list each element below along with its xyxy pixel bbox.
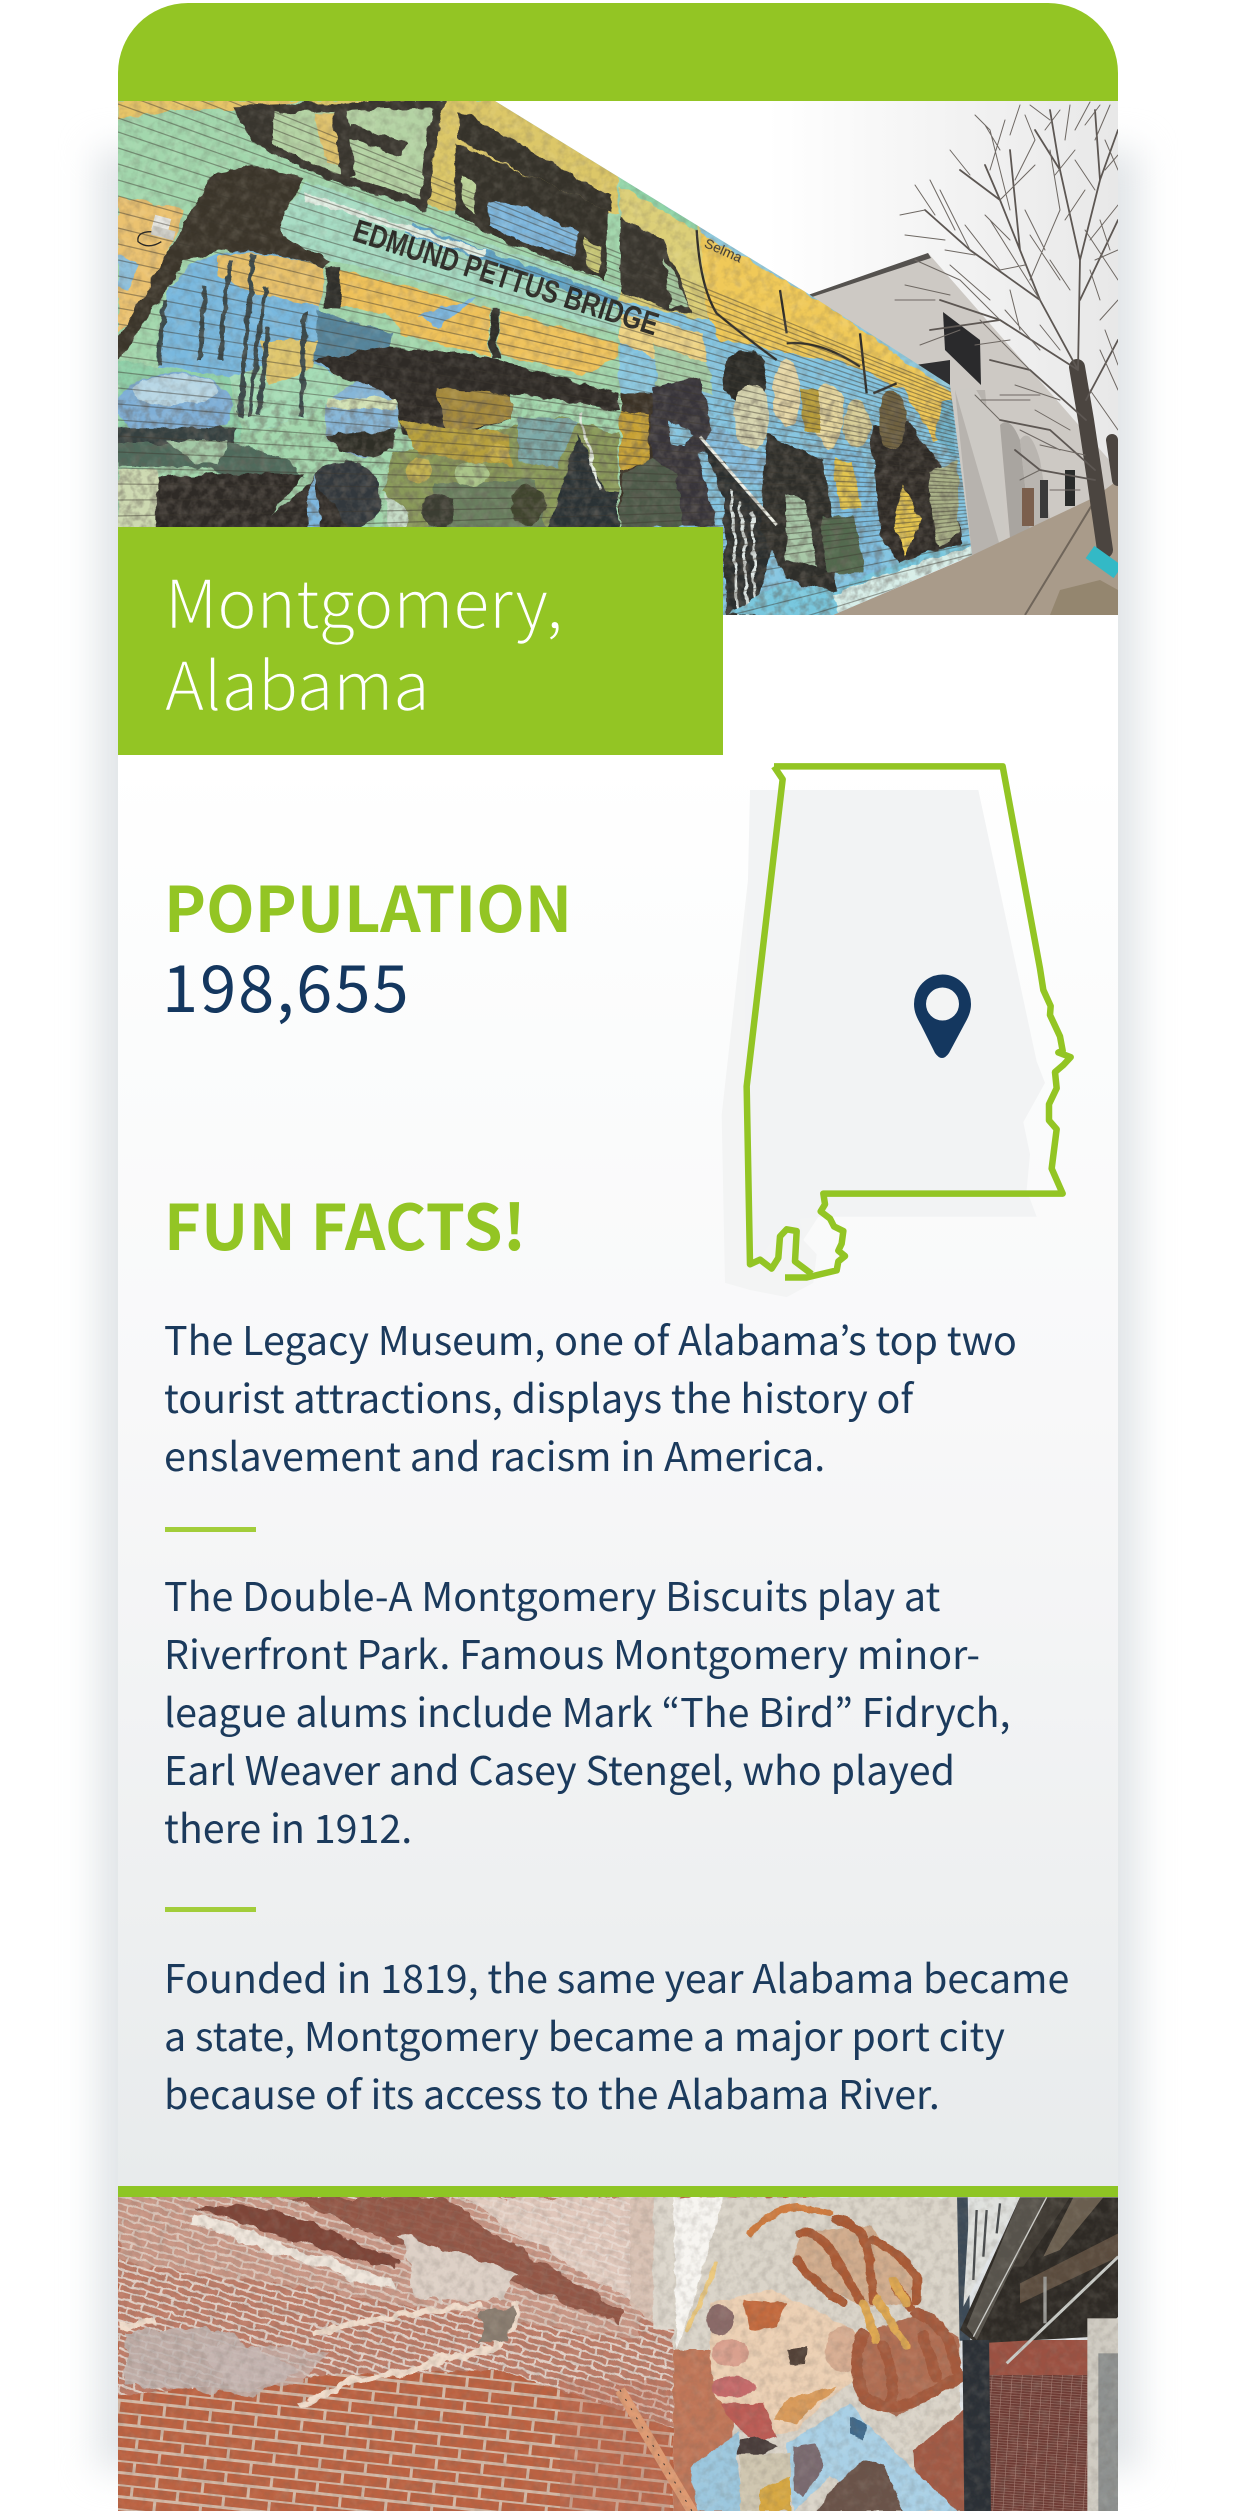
fact 3: Founded in 1819, the same year Alabama became [164,1948,1069,2005]
portrait mural wall [630,2197,967,2511]
population figure: 198,655 [162,937,411,1031]
top green header bar [118,3,1118,101]
fact 3: a state, Montgomery became a major port city [164,2006,1005,2063]
icon: Alabama state map with pin [730,763,1074,1281]
brick wall [118,2190,818,2511]
photo: brick wall with portrait mural [118,2197,1118,2511]
mural wall: Selma [702,235,745,266]
sidewalk [833,480,1118,615]
fact 2: there in 1912. [164,1798,412,1854]
tree [895,102,1118,550]
fact 3: because of its access to the Alabama River. [164,2064,940,2121]
fact 2 [164,1566,1011,1854]
fact 2: Riverfront Park. Famous Montgomery minor- [164,1624,980,1680]
photo: civil rights mural on brick wall [118,101,1118,615]
title: Alabama [165,634,430,730]
fact 1: The Legacy Museum, one of Alabama’s top two [164,1310,1017,1366]
teal rail [1090,552,1118,572]
panel: title box [118,527,723,755]
heading: fun facts: FUN FACTS! [164,1178,526,1269]
fact 2: The Double-A Montgomery Biscuits play at [164,1566,940,1622]
fact 1 [164,1310,1017,1482]
mural wall [118,101,1118,615]
map outline [747,766,1071,1277]
title [165,552,563,730]
wall box [138,215,176,246]
building [808,253,1118,562]
fact 1: tourist attractions, displays the history of [164,1368,913,1424]
mural wall: EDMUND PETTUS BRIDGE [349,212,663,342]
fact 2: Earl Weaver and Casey Stengel, who played [164,1740,955,1796]
map shadow [722,790,1045,1297]
panel: card body [118,60,1118,2186]
icon: location pin [914,974,971,1058]
title: Montgomery, [165,552,563,648]
fact 1: enslavement and racism in America. [164,1426,825,1482]
fact 3 [164,1948,1069,2121]
heading: population: POPULATION [164,860,572,951]
bottom green rule [118,2186,1118,2197]
fact 2: league alums include Mark “The Bird” Fidrych, [164,1682,1011,1738]
